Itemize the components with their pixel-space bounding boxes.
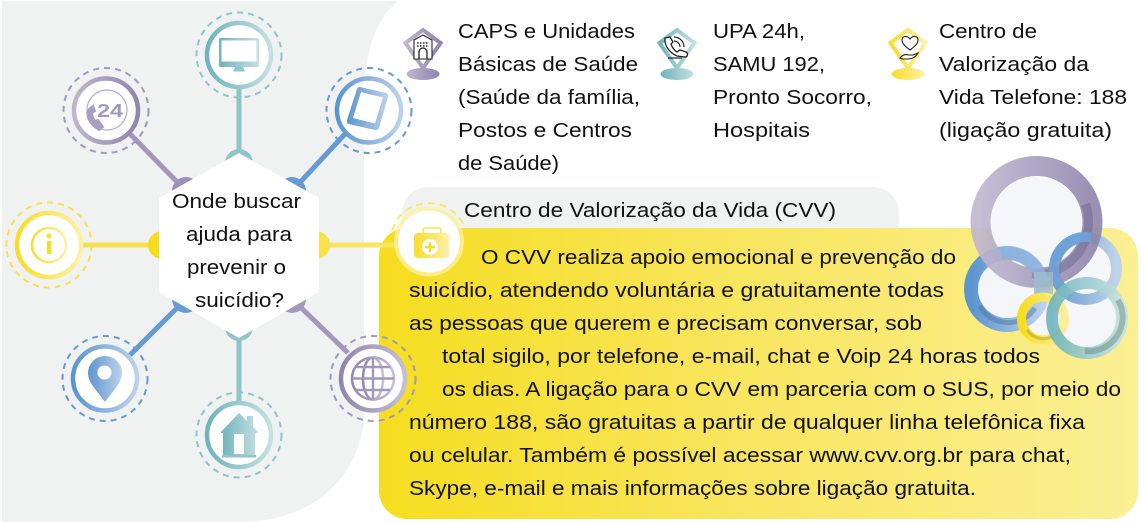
central hexagon with question: suicídio? (195, 289, 284, 312)
text block: CVV description: total sigilo, por telefone, e-mail, chat e Voip 24 horas todos (442, 345, 1040, 368)
text block: CAPS (458, 20, 640, 175)
icon: globe (330, 336, 416, 421)
text block: CVV telephone: (ligação gratuita) (939, 119, 1112, 142)
central hexagon with question: ajuda para (186, 223, 293, 246)
text block: CVV description: O CVV realiza apoio emocional e prevenção do (481, 246, 956, 269)
text block: CVV description: os dias. A ligação para o CVV em parceria com o SUS, por meio do (442, 378, 1121, 401)
text block: CVV description: ou celular. Também é possível acessar www.cvv.org.br para chat, (409, 444, 1071, 467)
text block: UPA: SAMU 192, (713, 53, 825, 76)
connector lines (82, 88, 406, 403)
icon: 24 hour phone: 24 (97, 100, 124, 121)
icon: house (196, 392, 282, 478)
text block: CAPS: de Saúde) (458, 152, 559, 175)
panel: CVV title pill (390, 187, 899, 280)
icon: 24 hour phone (64, 68, 148, 153)
text block: CVV telephone: Vida Telefone: 188 (939, 86, 1127, 109)
text block: CAPS: Básicas de Saúde (458, 53, 638, 76)
icon: computer monitor (196, 12, 282, 98)
heading: CVV title: Centro de Valorização da Vida (CVV) (464, 199, 836, 222)
central hexagon with question: prevenir o (187, 256, 286, 279)
text block: CAPS: CAPS e Unidades (458, 20, 635, 43)
text block: UPA: Hospitais (713, 119, 810, 142)
text block: UPA: Pronto Socorro, (713, 86, 872, 109)
icon: medical kit (394, 206, 464, 276)
text block: CVV description: Skype, e-mail e mais informações sobre ligação gratuita. (409, 477, 976, 500)
icon: heart in hand pin (890, 30, 926, 80)
central hexagon with question (159, 153, 319, 338)
text block: CAPS: (Saúde da família, (458, 86, 640, 109)
text block: CVV telephone: Valorização da (939, 53, 1090, 76)
icon: phone pin (660, 30, 694, 80)
text block: CVV telephone (939, 20, 1127, 142)
central hexagon with question: Onde buscar (172, 190, 301, 213)
icon: tablet (326, 68, 412, 153)
panel: yellow CVV description (379, 228, 1138, 519)
text block: CVV description: suicídio, atendendo voluntária e gratuitamente todas (409, 279, 944, 302)
text block: UPA (713, 20, 872, 142)
text block: CAPS: Postos e Centros (458, 119, 632, 142)
decorative interlocking rings (971, 166, 1123, 353)
text block: CVV description: as pessoas que querem e precisam conversar, sob (409, 312, 922, 335)
grey background panel (2, 1, 398, 522)
text block: CVV description: número 188, são gratuitas a partir de qualquer linha telefônica fixa (409, 411, 1086, 434)
text block: CVV description (409, 246, 1121, 500)
text block: CVV telephone: Centro de (939, 20, 1037, 43)
icon: location pin (62, 336, 148, 421)
icon: information (6, 202, 92, 288)
text block: UPA: UPA 24h, (713, 20, 805, 43)
icon: building pin (406, 30, 440, 80)
